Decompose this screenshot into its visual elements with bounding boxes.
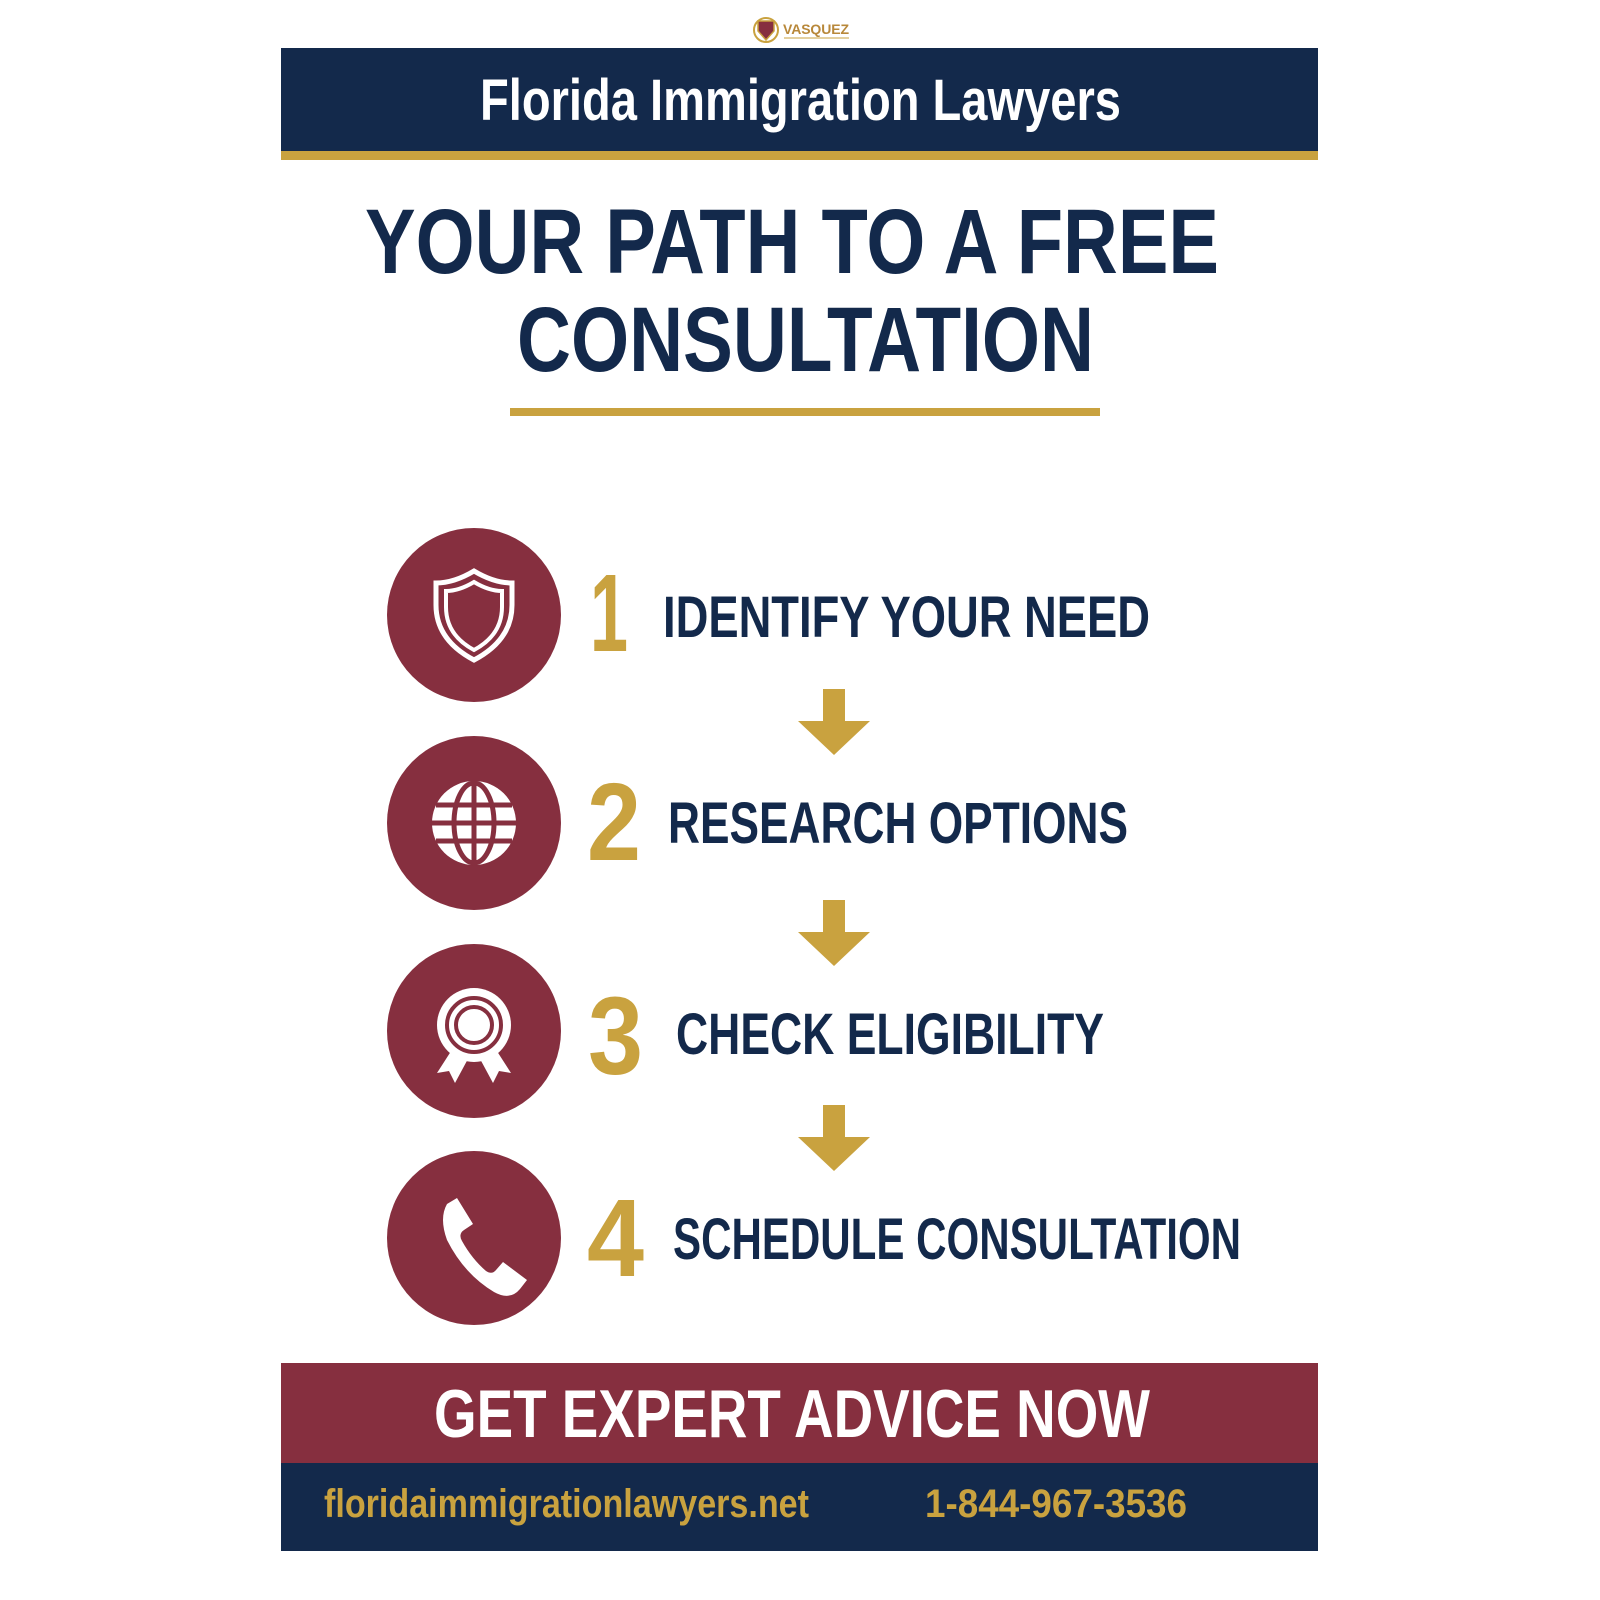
arrow 3 (798, 1105, 870, 1171)
title (365, 191, 1219, 391)
step 4: SCHEDULE CONSULTATION (673, 1207, 1241, 1272)
step 2: 2 (587, 761, 641, 884)
title: YOUR PATH TO A FREE (365, 191, 1219, 293)
header banner (281, 48, 1318, 160)
step 3 (387, 944, 1104, 1118)
cta banner: GET EXPERT ADVICE NOW (434, 1376, 1151, 1452)
step 3: 3 (588, 975, 643, 1098)
arrow 2 (798, 900, 870, 966)
step 4: 4 (587, 1177, 644, 1300)
title underline (510, 408, 1100, 416)
step 1 (387, 528, 1150, 702)
step 3: CHECK ELIGIBILITY (676, 1002, 1104, 1067)
cta banner (281, 1363, 1318, 1463)
icon: phone (387, 1151, 561, 1325)
icon: award badge (387, 944, 561, 1118)
title: CONSULTATION (517, 289, 1094, 391)
arrow 1 (798, 689, 870, 755)
header title: Florida Immigration Lawyers (480, 68, 1121, 133)
footer contact bar (281, 1463, 1318, 1551)
step 4 (387, 1151, 1241, 1325)
step 2: RESEARCH OPTIONS (668, 791, 1128, 856)
step 1: IDENTIFY YOUR NEED (663, 585, 1150, 650)
step 2 (387, 736, 1128, 910)
logo: VASQUEZ (783, 21, 849, 37)
footer contact bar: floridaimmigrationlawyers.net (324, 1482, 809, 1526)
footer contact bar: 1-844-967-3536 (925, 1482, 1187, 1526)
icon: shield (387, 528, 561, 702)
step 1: 1 (590, 552, 628, 675)
icon: globe (387, 736, 561, 910)
logo (754, 18, 849, 42)
